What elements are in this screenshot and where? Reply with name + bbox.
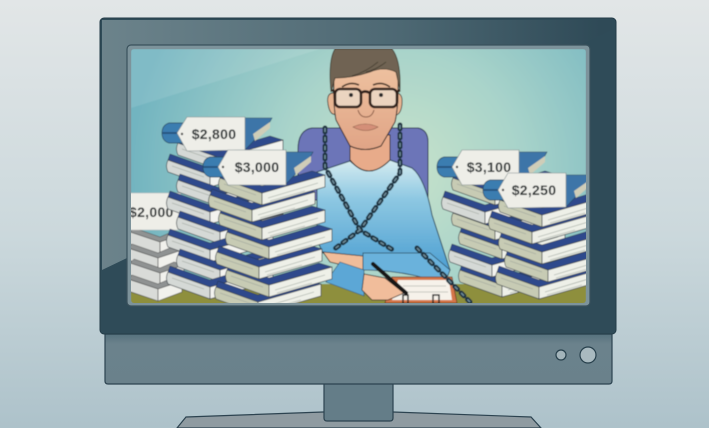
screen backdrop <box>131 49 586 303</box>
screen illustration <box>128 49 611 314</box>
nose <box>358 110 374 117</box>
chair <box>298 128 428 200</box>
price tag: $2,000: $2,000 <box>129 204 174 220</box>
large button <box>580 347 596 363</box>
far left gray stack of books <box>128 228 184 301</box>
monitor lower panel <box>105 334 612 384</box>
back left stack of books <box>166 136 283 299</box>
torso and sleeves <box>317 160 450 270</box>
price tag: $3,100 <box>437 150 547 185</box>
face <box>334 58 398 150</box>
hair strands <box>352 62 386 76</box>
pen <box>373 264 406 293</box>
monitor bezel <box>100 18 616 334</box>
price tag: $2,250: $2,250 <box>512 182 556 198</box>
screen glare <box>131 49 320 108</box>
price tag: $2,800 <box>162 117 272 151</box>
right ear <box>396 93 402 115</box>
clipboard with paper <box>385 277 457 304</box>
front right stack of books <box>488 194 586 300</box>
left ear <box>328 93 336 114</box>
hand <box>362 274 404 300</box>
monitor neck <box>324 382 393 421</box>
price tag: $2,000 <box>129 193 181 230</box>
price tag: $3,000 <box>203 150 313 185</box>
price tag: $3,100: $3,100 <box>467 159 511 175</box>
student figure <box>317 49 450 296</box>
mouth <box>353 124 378 130</box>
forearm <box>323 252 363 270</box>
eyes <box>349 93 383 97</box>
neck <box>350 135 390 171</box>
sleeve on desk <box>363 253 450 278</box>
hair <box>330 49 400 92</box>
glasses <box>332 89 400 107</box>
desk <box>131 284 586 304</box>
small button <box>556 350 566 360</box>
chain crossing the chest <box>325 125 470 302</box>
price tag: $3,000: $3,000 <box>235 159 279 175</box>
lower sleeve <box>326 262 364 296</box>
price tag: $2,800: $2,800 <box>192 126 236 142</box>
front left stack of books <box>208 171 332 314</box>
monitor base <box>177 412 541 428</box>
price tag: $2,250 <box>483 173 593 208</box>
back right stack of books <box>442 171 565 297</box>
eyebrows <box>342 83 390 87</box>
